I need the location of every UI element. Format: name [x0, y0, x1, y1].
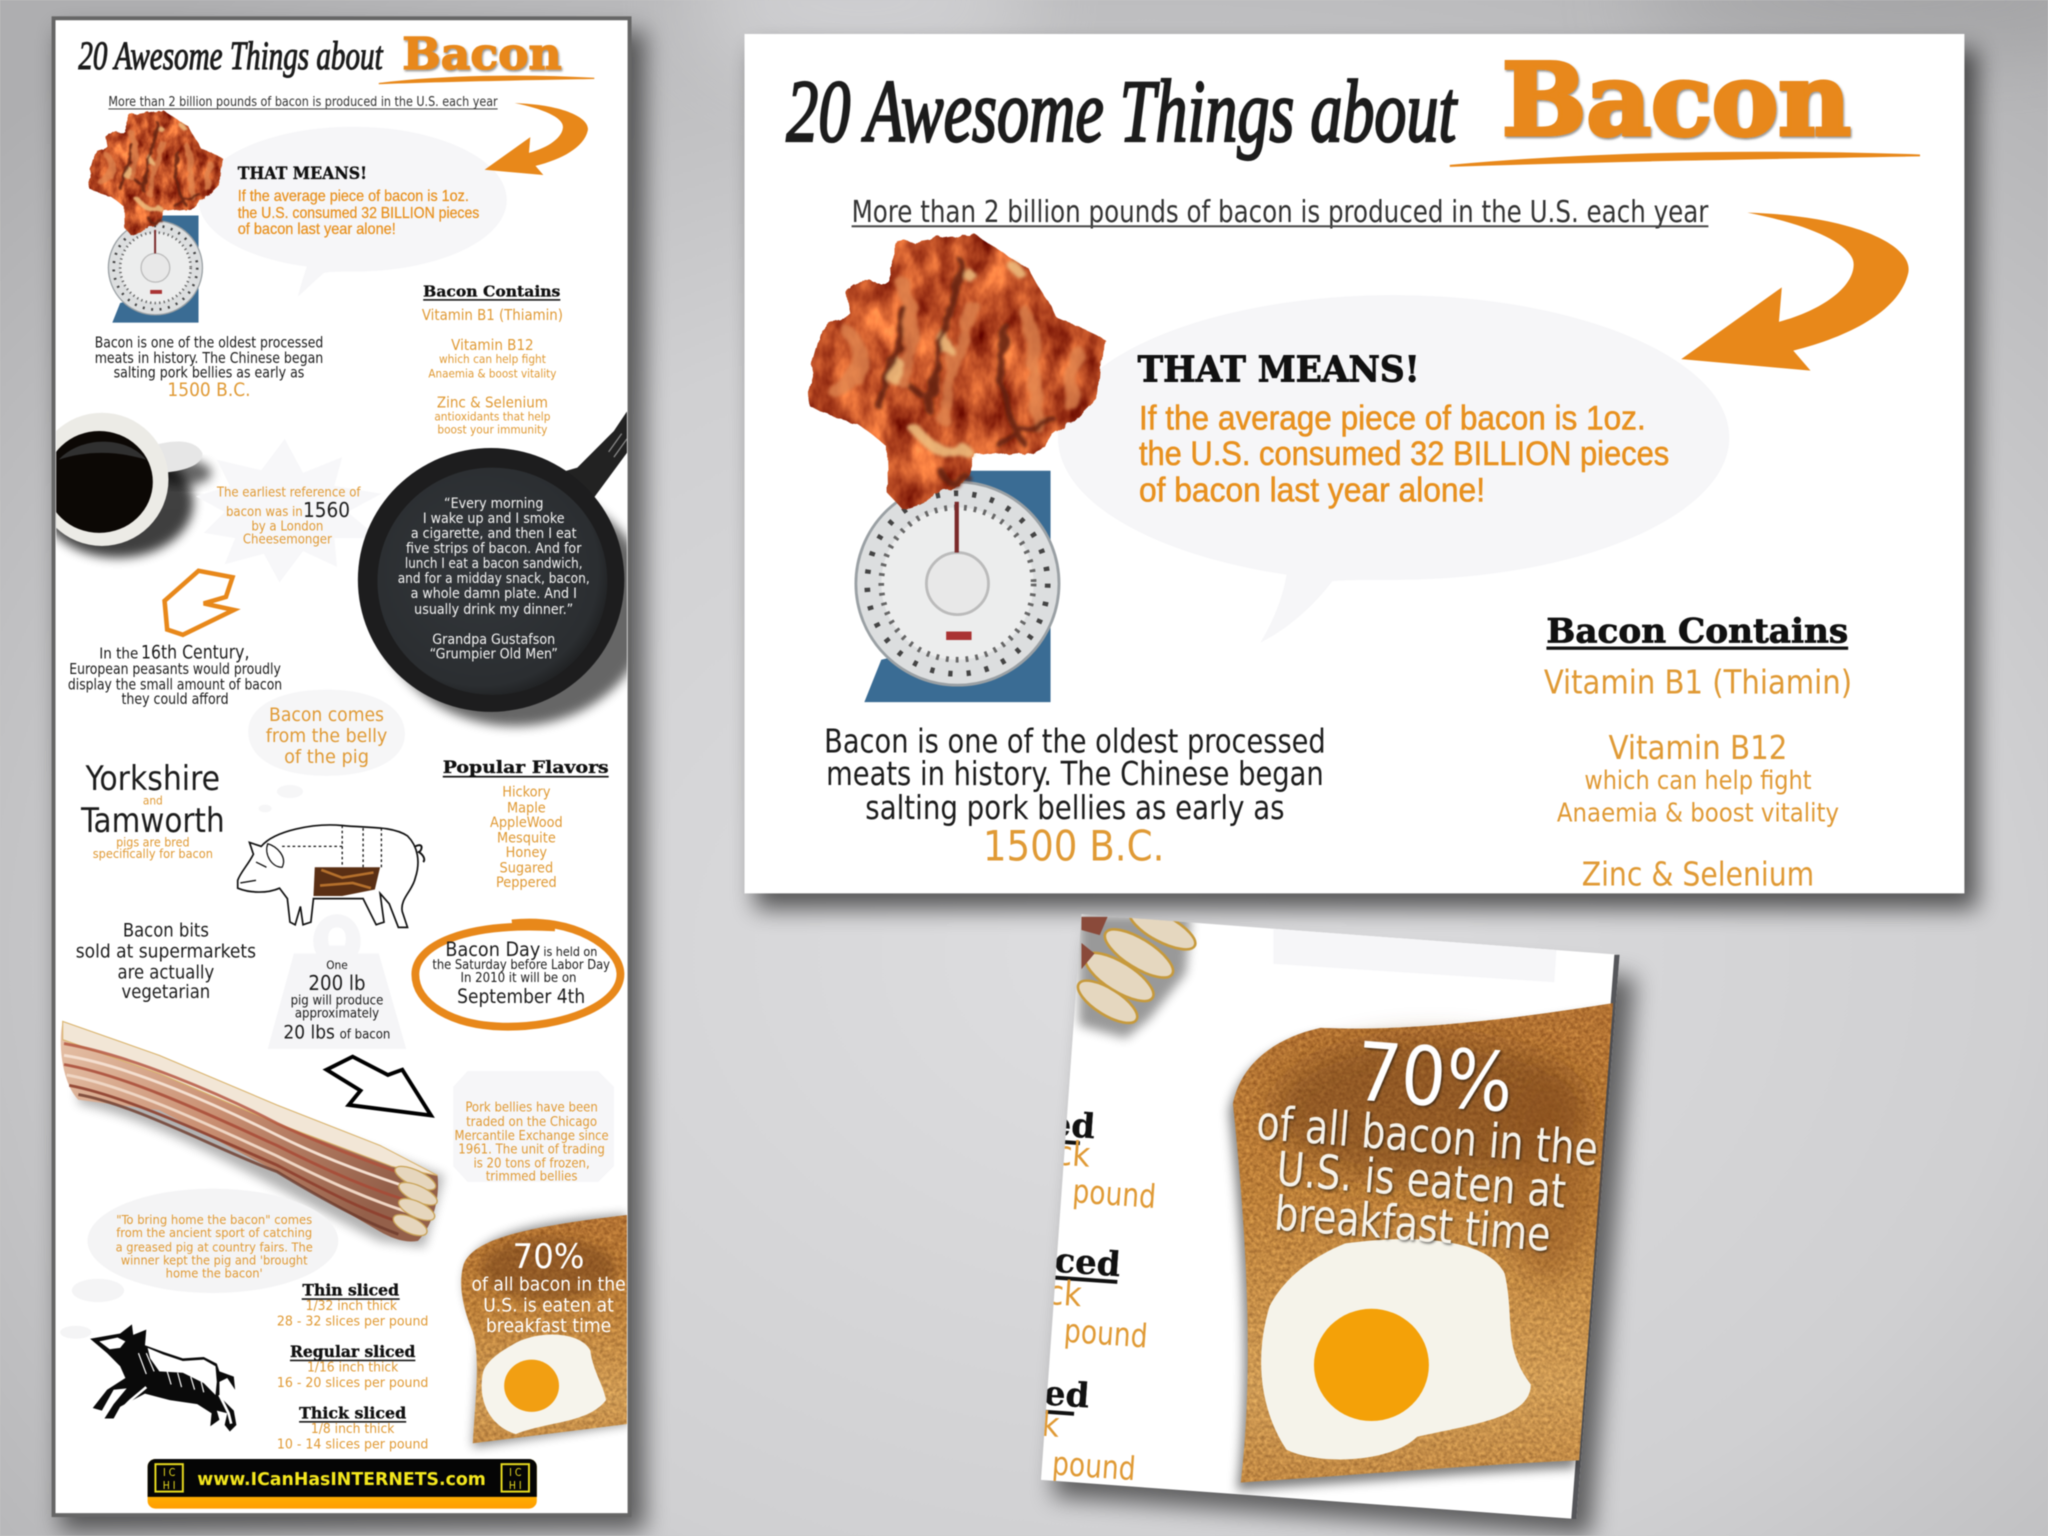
icon: frying pan with quote: Grandpa Gustafson: [432, 632, 555, 648]
bacon contains: Vitamin B12: [451, 336, 534, 354]
thought bubble: belly of the pig: Bacon comes: [269, 704, 384, 726]
text: 200 lb pig: [283, 958, 390, 1043]
arrow: orange outline: [165, 571, 234, 635]
icon: frying pan with quote: “Grumpier Old Men”: [430, 646, 558, 662]
callout: bacon day: [415, 923, 620, 1027]
bacon contains: Bacon Contains: [1546, 612, 1848, 652]
thought bubble: bring home the bacon: home the bacon': [166, 1266, 263, 1281]
yorkshire and tamworth: Tamworth: [80, 801, 225, 841]
cropped text: slice list: ck: [1046, 1273, 1083, 1315]
title: 20 Awesome Things about: [786, 63, 1458, 161]
text: oldest processed meats: 1500 B.C.: [983, 822, 1164, 871]
text: oldest processed meats: meats in history. The Chinese began: [826, 755, 1324, 793]
cropped text: slice list: pound: [1063, 1312, 1149, 1355]
faint box: [1273, 925, 1557, 982]
slice thickness list: 1/8 inch thick: [311, 1421, 395, 1437]
text: oldest processed meats: salting pork bellies as early as: [114, 363, 304, 381]
text: 16th century: 16th Century,: [141, 642, 249, 663]
cropped text: slice list: pound: [1051, 1444, 1137, 1488]
slice thickness list: 1/32 inch thick: [306, 1298, 398, 1314]
bacon contains: which can help fight: [1584, 766, 1812, 796]
popular flavors: Sugared: [500, 860, 553, 876]
icon: frying pan with quote: and for a midday snack, bacon,: [398, 571, 590, 587]
speech bubble: that means: If the average piece of bacon is 1oz.: [1139, 400, 1646, 438]
cropped text: slice list: ced: [1053, 1241, 1122, 1285]
bacon contains: which can help fight: [439, 352, 546, 366]
callout: bacon day: Bacon Day: [445, 938, 540, 961]
text: bacon bits: sold at supermarkets: [76, 941, 256, 962]
speech bubble: that means: [199, 127, 507, 296]
image: toast with egg: of all bacon in the: [1255, 1096, 1600, 1178]
text: oldest processed meats: salting pork bellies as early as: [865, 789, 1285, 827]
slice thickness list: 1/16 inch thick: [307, 1359, 399, 1375]
text: oldest processed meats: Bacon is one of the oldest processed: [95, 333, 323, 351]
yorkshire and tamworth: Yorkshire: [85, 759, 220, 799]
starburst: earliest reference: The earliest reference of: [216, 485, 361, 500]
footer: website banner: H I: [509, 1480, 522, 1492]
popular flavors: Popular Flavors: [443, 758, 609, 778]
image: toast with egg: 70%: [1353, 1026, 1516, 1132]
icon: frying pan with quote: “Every morning: [444, 496, 543, 512]
thought bubble: belly of the pig: [248, 690, 405, 812]
yorkshire and tamworth: and: [143, 794, 163, 808]
cropped text: slice list: [1014, 1103, 1163, 1488]
image: toast with egg: [461, 1215, 630, 1447]
text: bacon bits: [76, 920, 256, 1003]
cropped text: slice list: pound: [1071, 1172, 1157, 1216]
panel: full infographic: [35, 18, 650, 1531]
text: 200 lb pig: 20 lbs: [283, 1021, 335, 1043]
icon: bacon heap: [88, 111, 222, 235]
text: 16th century: In the: [99, 644, 138, 662]
thought bubble: bring home the bacon: a greased pig at country fairs. The: [116, 1240, 313, 1255]
callout: bacon day: September 4th: [457, 985, 585, 1008]
text: 200 lb pig: approximately: [295, 1006, 379, 1021]
title: [78, 28, 594, 84]
bacon contains: [1544, 612, 1852, 894]
cropped text: slice list: ck: [1054, 1133, 1092, 1176]
bacon contains: boost your immunity: [437, 423, 547, 437]
text: 200 lb pig: One: [326, 958, 348, 972]
popular flavors: Mesquite: [497, 830, 556, 846]
icon: frying pan with quote: a cigarette, and then I eat: [411, 526, 577, 542]
starburst: earliest reference: 1560: [303, 498, 350, 522]
slice thickness list: Thin sliced: [302, 1281, 399, 1300]
footer: website banner: www.ICanHasINTERNETS.com: [197, 1470, 486, 1490]
icon: weight shape: [268, 914, 406, 1049]
popular flavors: Hickory: [502, 785, 551, 801]
image: toast with egg: 70%: [513, 1237, 584, 1277]
popular flavors: Maple: [507, 800, 546, 816]
bacon contains: Bacon Contains: [423, 282, 560, 300]
arrow: curved orange: [1681, 213, 1909, 371]
text: 16th century: European peasants would proudly: [69, 660, 281, 678]
thought bubble: bring home the bacon: "To bring home the bacon" comes: [116, 1213, 312, 1228]
text: 200 lb pig: pig will produce: [291, 993, 383, 1008]
thought bubble: bring home the bacon: from the ancient sport of catching: [116, 1226, 312, 1241]
title: [786, 43, 1920, 166]
title: 20 Awesome Things about: [78, 33, 384, 78]
thought bubble: belly of the pig: from the belly: [266, 725, 387, 747]
text box: pork bellies: traded on the Chicago: [466, 1115, 597, 1130]
cropped text: slice list: ed: [1048, 1104, 1096, 1147]
icon: black boar: [90, 1324, 236, 1432]
bacon contains: Zinc & Selenium: [1582, 856, 1814, 894]
bacon contains: Vitamin B1 (Thiamin): [1544, 664, 1852, 702]
panel: zoomed toast detail: [1014, 900, 1635, 1536]
icon: kitchen scale: [856, 471, 1059, 702]
text box: pork bellies: trimmed bellies: [486, 1170, 577, 1185]
text box: pork bellies: is 20 tons of frozen,: [473, 1157, 590, 1172]
bacon contains: antioxidants that help: [434, 410, 551, 424]
starburst: earliest reference: [196, 486, 362, 548]
icon: frying pan with quote: five strips of bacon. And for: [406, 541, 582, 557]
text box: pork bellies: [453, 1071, 614, 1185]
text: 200 lb pig: 200 lb: [308, 971, 366, 995]
slice thickness list: Regular sliced: [290, 1342, 415, 1361]
starburst: earliest reference: bacon was in: [226, 505, 303, 520]
image: toast with egg: of all bacon in the: [472, 1274, 626, 1295]
text: oldest processed meats: [824, 722, 1326, 871]
text box: pork bellies: 1961. The unit of trading: [458, 1142, 605, 1157]
panel: zoomed top detail: [744, 34, 1977, 909]
text: oldest processed meats: 1500 B.C.: [167, 379, 251, 401]
subtitle: More than 2 billion pounds of bacon is produced in the U.S. each year: [108, 94, 498, 110]
image: toast with egg: breakfast time: [1272, 1186, 1553, 1263]
slice thickness list: [277, 1281, 428, 1452]
popular flavors: Honey: [506, 845, 547, 861]
text: bacon bits: vegetarian: [122, 982, 210, 1003]
starburst: earliest reference: by a London: [251, 519, 323, 534]
popular flavors: [443, 758, 609, 891]
bacon contains: Zinc & Selenium: [437, 394, 548, 412]
icon: frying pan with quote: usually drink my dinner.”: [414, 602, 573, 618]
icon: coffee cup: [35, 413, 212, 558]
thought bubble: bring home the bacon: [60, 1189, 338, 1339]
text box: pork bellies: Pork bellies have been: [465, 1101, 598, 1116]
cropped text: slice list: ed: [1043, 1374, 1091, 1417]
image: toast with egg: [1229, 1003, 1613, 1490]
image: toast with egg: U.S. is eaten at: [1275, 1142, 1568, 1220]
slice thickness list: Thick sliced: [299, 1403, 406, 1422]
arrow: black outline: [327, 1057, 431, 1115]
footer: website banner: I C: [509, 1467, 522, 1479]
arrow: curved orange: [485, 103, 588, 175]
icon: frying pan with quote: [358, 408, 650, 726]
subtitle: More than 2 billion pounds of bacon is produced in the U.S. each year: [852, 195, 1709, 230]
popular flavors: Peppered: [496, 875, 557, 891]
yorkshire and tamworth: [80, 759, 225, 861]
slice thickness list: 10 - 14 slices per pound: [277, 1436, 428, 1452]
speech bubble: that means: [1058, 295, 1729, 643]
icon: frying pan with quote: I wake up and I smoke: [423, 511, 565, 527]
popular flavors: AppleWood: [490, 815, 563, 831]
speech bubble: that means: the U.S. consumed 32 BILLION pieces: [1139, 435, 1669, 473]
text: bacon bits: Bacon bits: [123, 920, 209, 941]
slice thickness list: 28 - 32 slices per pound: [277, 1314, 428, 1330]
title: Bacon: [1502, 43, 1851, 159]
icon: frying pan with quote: a whole damn plate. And I: [411, 586, 577, 602]
image: toast with egg: U.S. is eaten at: [483, 1295, 614, 1316]
speech bubble: that means: If the average piece of bacon is 1oz.: [238, 188, 469, 205]
image: bacon strips: [61, 1021, 444, 1247]
starburst: earliest reference: Cheesemonger: [243, 532, 332, 547]
bacon contains: Anaemia & boost vitality: [428, 366, 556, 380]
slice thickness list: 16 - 20 slices per pound: [277, 1375, 428, 1391]
callout: bacon day: In 2010 it will be on: [461, 971, 577, 986]
footer: website banner: H I: [163, 1480, 176, 1492]
image: toast with egg: breakfast time: [486, 1316, 611, 1337]
text: oldest processed meats: [95, 333, 323, 401]
text box: pork bellies: Mercantile Exchange since: [455, 1129, 609, 1144]
text: 16th century: display the small amount of bacon: [68, 676, 282, 694]
cropped text: slice list: ck: [1024, 1404, 1061, 1446]
text: oldest processed meats: meats in history. The Chinese began: [95, 349, 323, 367]
bacon contains: Vitamin B1 (Thiamin): [422, 306, 563, 324]
icon: bacon heap: [807, 235, 1102, 509]
yorkshire and tamworth: pigs are bred: [116, 834, 190, 849]
callout: bacon day: is held on: [543, 944, 597, 959]
bacon contains: [422, 282, 563, 437]
text: 200 lb pig: of bacon: [340, 1027, 390, 1042]
icon: frying pan with quote: lunch I eat a bacon sandwich,: [405, 556, 583, 572]
thought bubble: bring home the bacon: winner kept the pig and 'brought: [121, 1253, 308, 1268]
speech bubble: that means: of bacon last year alone!: [238, 221, 396, 238]
icon: pig with belly cut: [238, 825, 424, 927]
speech bubble: that means: of bacon last year alone!: [1139, 472, 1485, 510]
footer: website banner: I C: [163, 1467, 176, 1479]
bacon contains: Anaemia & boost vitality: [1557, 799, 1839, 829]
text: 16th century: [68, 642, 282, 708]
speech bubble: that means: the U.S. consumed 32 BILLION pieces: [238, 205, 479, 222]
speech bubble: that means: THAT MEANS!: [238, 164, 367, 183]
footer: website banner: [148, 1459, 537, 1509]
speech bubble: that means: THAT MEANS!: [1138, 349, 1420, 390]
image: bacon end: [1072, 900, 1201, 1038]
thought bubble: belly of the pig: of the pig: [284, 746, 369, 768]
yorkshire and tamworth: specifically for bacon: [93, 846, 213, 861]
callout: bacon day: the Saturday before Labor Day: [432, 958, 610, 973]
icon: kitchen scale: [108, 216, 202, 323]
text: oldest processed meats: Bacon is one of the oldest processed: [824, 722, 1326, 760]
bacon contains: Vitamin B12: [1608, 729, 1787, 767]
text: bacon bits: are actually: [118, 962, 214, 983]
title: Bacon: [402, 28, 562, 80]
text: 16th century: they could afford: [121, 690, 229, 708]
